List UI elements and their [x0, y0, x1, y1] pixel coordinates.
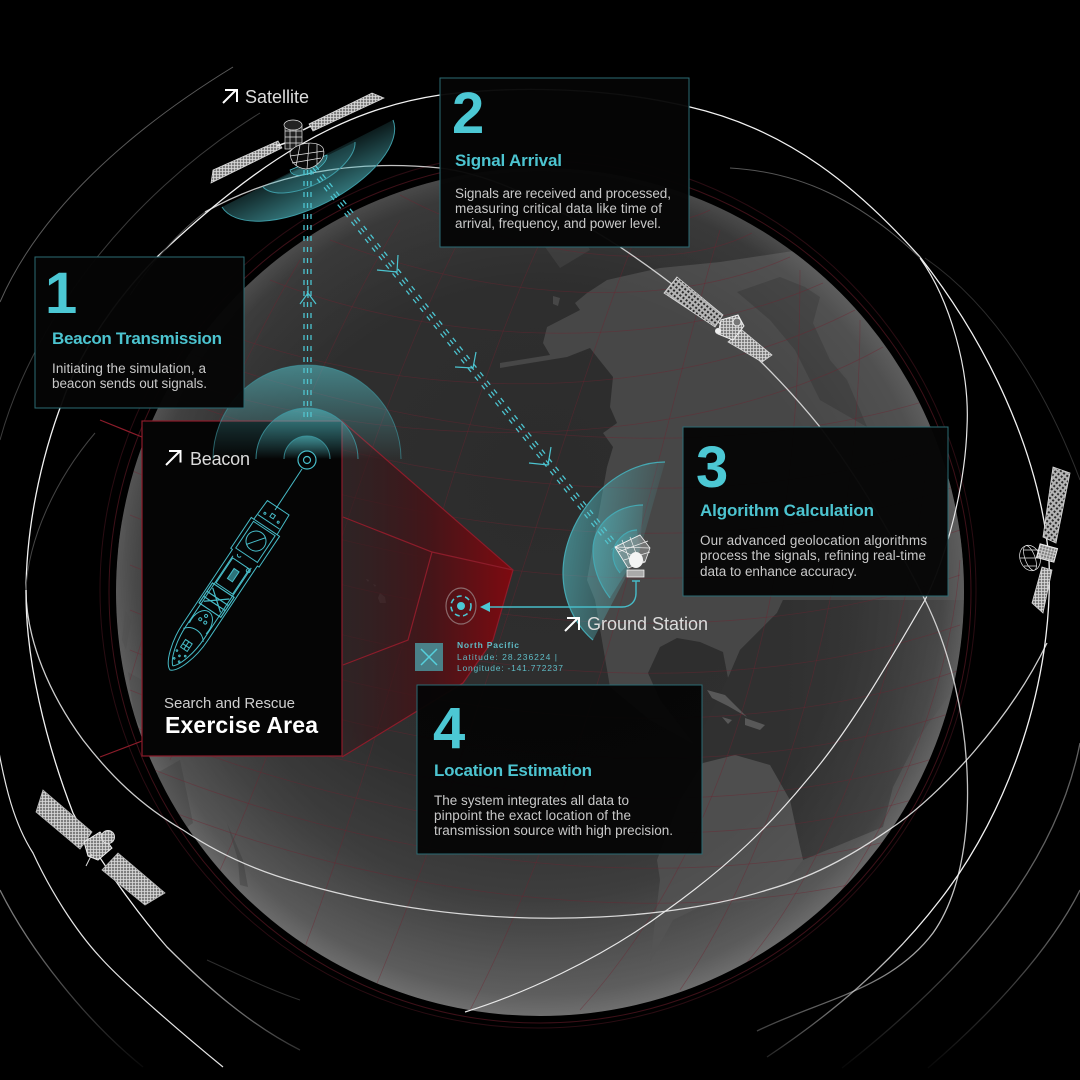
land: arctic patches [737, 277, 867, 427]
panel: step 2: arrival, frequency, and power level. [455, 216, 661, 231]
signal waves: beacon [213, 365, 401, 459]
signal waves: satellite [222, 120, 395, 221]
panel: step 3: process the signals, refining real-time [700, 548, 926, 563]
heading: Location Estimation [434, 761, 592, 780]
panel: step 4: transmission source with high precision. [434, 823, 673, 838]
number 2: 2 [452, 81, 484, 146]
label: beacon: Beacon [190, 449, 250, 469]
arrow: beam up [300, 286, 316, 304]
icon: location target [446, 588, 476, 624]
signal beam: satellite to ground station [310, 166, 618, 549]
heading: Beacon Transmission [52, 329, 222, 348]
arrow: beam chevron 3 [529, 447, 551, 465]
satellite 3 (right) [1016, 467, 1070, 613]
location readout: Latitude: 28.236224 | [457, 652, 557, 662]
label: satellite: Satellite [245, 87, 309, 107]
ocean: Atlantic [776, 723, 916, 860]
text: Search and Rescue: Search and Rescue [164, 695, 295, 712]
icon: X marker [415, 643, 443, 671]
arrow: beam chevron 2 [455, 352, 476, 368]
icon: ground station dish [615, 535, 650, 577]
globe rim light [116, 168, 964, 1016]
latitude and longitude grid [130, 175, 960, 1010]
icon: beacon arrow [166, 451, 180, 465]
body text: Signals are received and processed, [455, 186, 671, 201]
heading: Algorithm Calculation [700, 501, 874, 520]
icon: beacon target [275, 451, 316, 510]
number 1: 1 [45, 261, 77, 326]
land: Caribbean islands [707, 690, 765, 730]
panel: search and rescue exercise area [142, 421, 342, 756]
panel: step 4 [417, 685, 702, 854]
icon: ship [156, 498, 292, 679]
panel: step 1: beacon sends out signals. [52, 376, 207, 391]
body text: The system integrates all data to [434, 793, 629, 808]
label: ground station: Ground Station [587, 614, 708, 634]
body text: Our advanced geolocation algorithms [700, 533, 927, 548]
satellite 4 (lower left) [36, 790, 165, 905]
body text: Initiating the simulation, a [52, 361, 206, 376]
land: South America [656, 755, 800, 916]
land: top patches [546, 248, 590, 268]
signal beam: beacon to satellite [300, 170, 316, 459]
satellite 1 (main) [211, 93, 384, 183]
land: North America [500, 251, 964, 684]
land: islands off Alaska [553, 296, 560, 306]
arrow: ground station to target [480, 581, 640, 612]
signal waves: ground station [563, 462, 665, 640]
land: Hawaii [366, 579, 386, 603]
heading: Signal Arrival [455, 151, 562, 170]
panel: step 4: pinpoint the exact location of the [434, 808, 631, 823]
red search area [100, 420, 513, 757]
satellite 2 (over the globe) [664, 277, 772, 362]
panel: step 2 [440, 78, 689, 247]
panel: step 3 [683, 427, 948, 596]
panel: step 3: data to enhance accuracy. [700, 564, 857, 579]
location readout: North Pacific [457, 640, 519, 650]
panel: step 2: measuring critical data like time of [455, 201, 662, 216]
number 3: 3 [696, 435, 728, 500]
text: Exercise Area: Exercise Area [165, 712, 318, 738]
panel: step 1 [35, 257, 244, 408]
number 4: 4 [433, 696, 465, 761]
land: left patches [118, 515, 248, 887]
location readout [457, 640, 563, 673]
arrow: beam chevron 1 [377, 255, 398, 272]
globe [100, 152, 976, 1028]
location readout: Longitude: -141.772237 [457, 663, 563, 673]
